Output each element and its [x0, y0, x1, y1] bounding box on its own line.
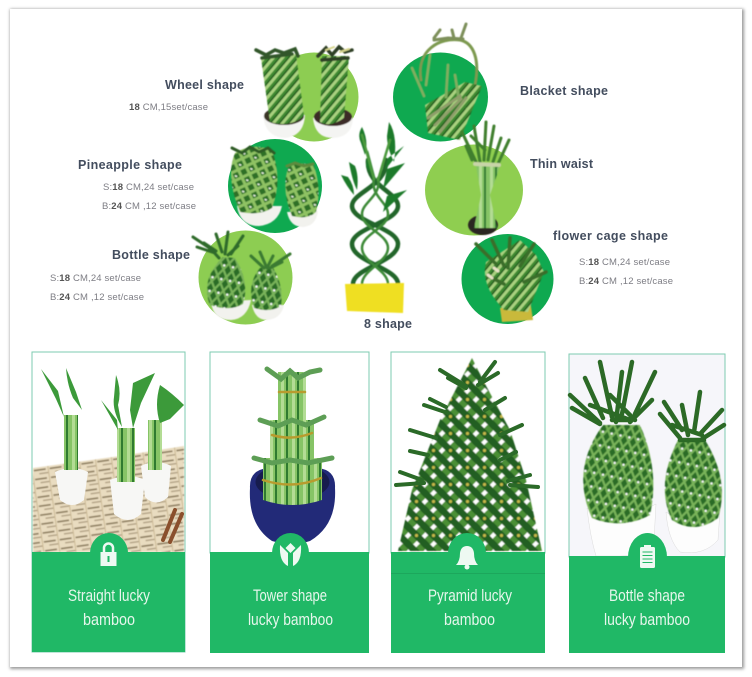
photo: white pots [587, 504, 720, 556]
panel footer: straight [32, 533, 185, 652]
spec: pineapple small: S:18 CM,24 set/case [103, 182, 194, 193]
photo: pyramid lattice [398, 358, 542, 551]
panel: straight lucky bamboo [32, 352, 185, 652]
footer text: bamboo [83, 610, 135, 629]
footer text: lucky bamboo [248, 610, 333, 629]
spec: bottle small: S:18 CM,24 set/case [50, 273, 141, 284]
tab with clipboard icon [628, 533, 667, 568]
spec: wheel shape: 18 CM,15set/case [129, 102, 208, 113]
photo: vases [583, 425, 653, 523]
spec: pineapple big: B:24 CM ,12 set/case [102, 201, 196, 212]
footer text: Tower shape [253, 586, 327, 605]
footer text [248, 586, 333, 629]
plant: bottle shape [193, 232, 290, 320]
tab with tulip icon [272, 533, 309, 566]
label: pineapple shape: Pineapple shape [78, 158, 182, 172]
plant: wheel shape [256, 47, 353, 138]
footer text: Bottle shape [609, 586, 685, 605]
panel: pyramid lucky bamboo [391, 352, 545, 553]
plant: thin waist [462, 122, 509, 235]
photo: pots [55, 462, 171, 520]
plant: pineapple shape [231, 147, 319, 227]
footer text [428, 586, 512, 629]
photo: gold ties [263, 392, 321, 485]
label: blacket shape: Blacket shape [520, 84, 608, 98]
photo: chopsticks [163, 510, 182, 542]
photo: stems [64, 415, 162, 482]
panel: tower shape lucky bamboo [210, 352, 369, 553]
photo: tier tops [254, 369, 332, 463]
tab with bell icon [448, 533, 486, 570]
panel: bottle shape lucky bamboo [569, 354, 725, 557]
footer text: bamboo [444, 610, 495, 629]
plant: flower cage shape [476, 238, 546, 322]
spec: flower cage big: B:24 CM ,12 set/case [579, 276, 673, 287]
footer text [68, 586, 150, 629]
pot: yellow [345, 283, 404, 313]
footer text: Straight lucky [68, 586, 150, 605]
label: 8 shape: 8 shape [364, 317, 412, 331]
panel footer: tower [210, 533, 369, 653]
footer text: Pyramid lucky [428, 586, 512, 605]
circle backgrounds [198, 52, 554, 324]
footer text [604, 586, 690, 629]
label: thin waist: Thin waist [530, 157, 594, 171]
photo: pot opening [256, 464, 330, 500]
tab with lock icon [90, 533, 128, 566]
photo: leaves [41, 368, 184, 430]
photo: bamboo mat [33, 446, 184, 552]
footer text: lucky bamboo [604, 610, 690, 629]
photo: tower tiers [263, 372, 322, 505]
label: bottle shape: Bottle shape [112, 248, 190, 262]
photo: foliage tufts [396, 362, 538, 487]
plant: 8 shape [341, 122, 407, 313]
panel footer: bottle [569, 533, 725, 653]
photo: navy pot [250, 468, 335, 544]
label: flower cage shape: flower cage shape [553, 229, 668, 243]
photo: vase tops [570, 362, 724, 440]
panel footer: pyramid [391, 533, 545, 653]
spec: bottle big: B:24 CM ,12 set/case [50, 292, 144, 303]
plant: blacket shape [412, 24, 482, 140]
label: wheel shape: Wheel shape [165, 78, 244, 92]
spec: flower cage small: S:18 CM,24 set/case [579, 257, 670, 268]
